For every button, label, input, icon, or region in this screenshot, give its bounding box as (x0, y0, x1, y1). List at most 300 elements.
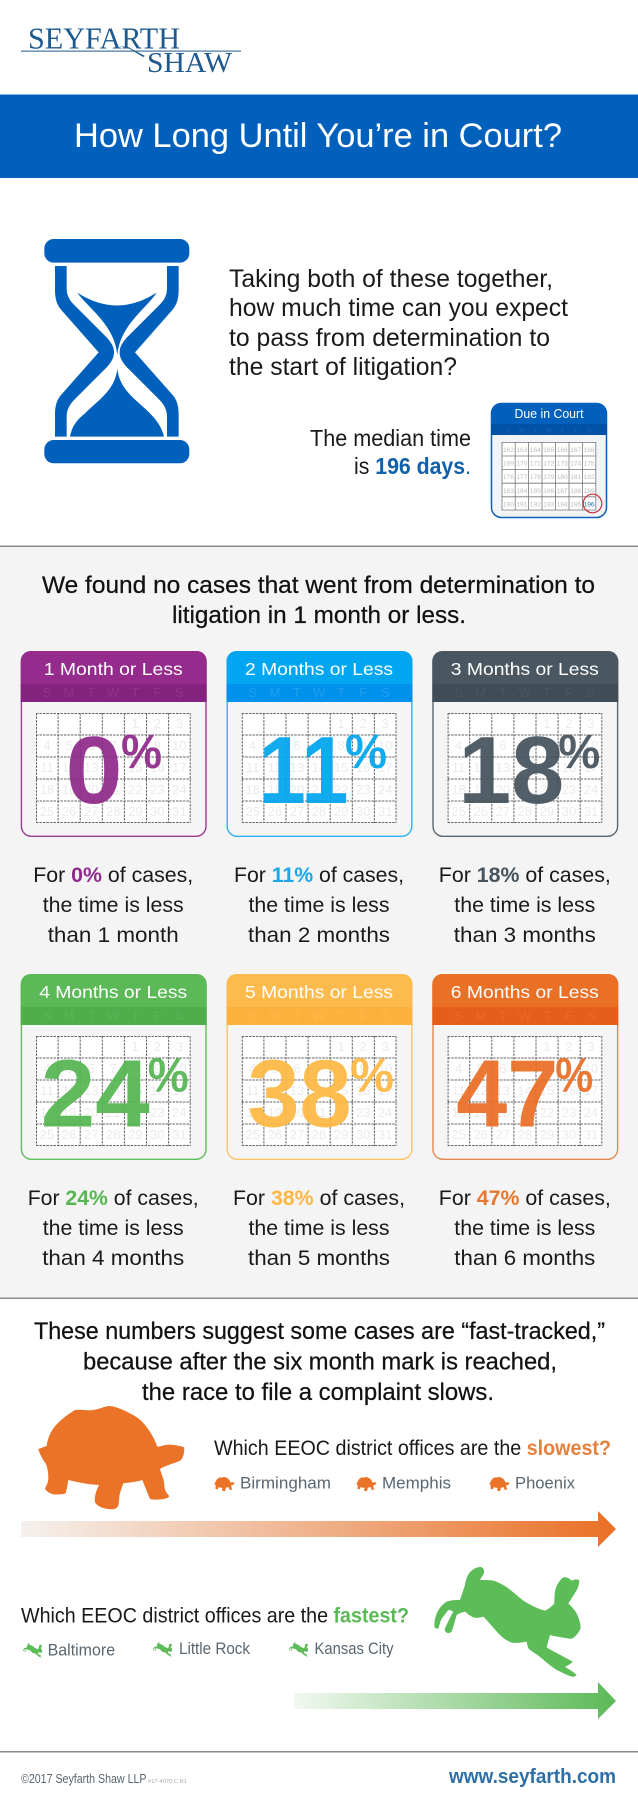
panel: 5 months or less: 11 (246, 1083, 260, 1098)
panel: 2 months or less: 1 (337, 716, 345, 731)
panel: 2 months or less: 25 (246, 804, 260, 819)
fastest office: Little Rock: Little Rock (179, 1639, 250, 1658)
panel: 3 months or less: 10 (584, 738, 598, 753)
footer rule (0, 1751, 638, 1752)
panel: 1 month or less: 6 (88, 738, 95, 753)
panel: 1 month or less: 30 (150, 804, 165, 819)
panel: 3 months or less: S (454, 685, 463, 700)
icon: due in court calendar: 167 (570, 447, 582, 454)
fastest office: Little Rock (153, 1639, 250, 1658)
panel: 2 months or less: % (345, 726, 387, 779)
panel: 6 months or less: For 47% of cases, (439, 1186, 611, 1210)
panel: 2 months or less: M (269, 685, 280, 700)
icon: due in court calendar: S (587, 428, 592, 434)
panel: 5 months or less: the time is less (248, 1216, 390, 1240)
icon: due in court calendar: 191 (516, 501, 528, 508)
panel: 3 months or less: 2 (565, 716, 573, 731)
panel: 4 months or less: 14 (106, 1083, 120, 1098)
icon: large turtle (38, 1406, 184, 1509)
panel: 6 months or less: M (475, 1008, 486, 1023)
panel: 1 month or less: 9 (154, 738, 161, 753)
panel: 3 months or less: 13 (496, 760, 510, 775)
panel: 2 months or less: 10 (378, 738, 392, 753)
panel: 3 months or less: 16 (562, 760, 576, 775)
fastest office: Baltimore: Baltimore (48, 1640, 115, 1660)
logo: Seyfarth Shaw (21, 20, 241, 79)
panel: 5 months or less: 20 (290, 1105, 304, 1120)
panel: 6 months or less: 27 (496, 1127, 510, 1142)
panel: 4 months or less: 6 (88, 1061, 95, 1076)
icon: due in court calendar: 195 (570, 501, 582, 508)
panel: 5 months or less: 28 (312, 1127, 326, 1142)
panel: 2 months or less: 5 (271, 738, 279, 753)
panel: 4 months or less: 9 (154, 1061, 161, 1076)
panel: 1 month or less: 27 (84, 804, 98, 819)
panel: 5 months or less: 8 (337, 1061, 345, 1076)
icon: due in court calendar: 183 (503, 488, 514, 495)
panel: 2 months or less: 21 (312, 782, 326, 797)
panel: 4 months or less: 2 (154, 1039, 161, 1054)
panel: 2 months or less: 26 (268, 804, 282, 819)
icon: due in court calendar: 194 (557, 501, 568, 508)
panel: 6 months or less: 11 (452, 1083, 465, 1098)
panel: 3 months or less: 22 (540, 782, 554, 797)
panel: 2 months or less: 27 (290, 804, 304, 819)
icon: due in court calendar: 163 (516, 447, 528, 454)
panel: 3 months or less: T (499, 685, 507, 700)
panel: 3 months or less: 9 (565, 738, 573, 753)
icon: due in court calendar: 172 (543, 461, 555, 468)
panel: 4 months or less: 15 (128, 1083, 143, 1098)
fastest office: Kansas City (289, 1639, 394, 1658)
panel: 2 months or less: 18 (246, 782, 260, 797)
panel: 6 months or less: W (519, 1008, 532, 1023)
panel: 6 months or less: 18 (451, 1105, 466, 1120)
panel: 2 months or less: 22 (334, 782, 348, 797)
panel: 1 month or less: 29 (128, 804, 143, 819)
panel: 4 months or less: 24 (41, 1040, 150, 1148)
panel: 2 months or less: than 2 months (248, 923, 390, 947)
panel: 2 months or less: T (337, 685, 345, 700)
panel: 3 months or less: 31 (584, 804, 598, 819)
panel: 5 months or less: 4 (249, 1061, 256, 1076)
panel: 3 months or less: 29 (540, 804, 554, 819)
panel: 4 months or less: 16 (150, 1083, 165, 1098)
panel: 2 months or less: 4 (249, 738, 256, 753)
panel: 5 months or less: 30 (356, 1127, 370, 1142)
panel: 5 months or less: 23 (356, 1105, 370, 1120)
panel: 1 month or less: 28 (106, 804, 120, 819)
panel: 5 months or less: For 38% of cases, (233, 1186, 405, 1210)
icon: due in court calendar: 170 (516, 461, 528, 468)
panel: 4 months or less: S (43, 1008, 52, 1023)
panel: 6 months or less: T (543, 1008, 551, 1023)
icon: due in court calendar: F (574, 428, 578, 434)
median time callout: The median time (310, 425, 471, 451)
panel: 1 month or less: For 0% of cases, (33, 863, 193, 887)
panel: 4 months or less: 25 (40, 1127, 54, 1142)
panel: 6 months or less: 8 (543, 1061, 551, 1076)
icon: due in court calendar: 166 (557, 447, 568, 454)
panel: 1 month or less: 16 (150, 760, 165, 775)
panel: 6 months or less: 3 (587, 1039, 595, 1054)
panel: 6 months or less: 13 (496, 1083, 510, 1098)
footer website: www.seyfarth.com (448, 1766, 616, 1788)
panel: 1 month or less: 2 (154, 716, 161, 731)
panel: 6 months or less: 21 (518, 1105, 532, 1120)
panel: 5 months or less: T (293, 1008, 301, 1023)
panel: 3 months or less: 15 (540, 760, 554, 775)
panel: 2 months or less: For 11% of cases, (234, 863, 404, 887)
panel: 2 months or less: W (313, 685, 326, 700)
panel: 5 months or less: 10 (378, 1061, 392, 1076)
panel: 3 months or less: 6 (499, 738, 506, 753)
panel: 5 months or less: 38 (248, 1040, 352, 1148)
panel: 4 months or less: 26 (62, 1127, 76, 1142)
panel: 1 month or less: 15 (128, 760, 143, 775)
slowest office: Memphis: Memphis (382, 1474, 451, 1492)
icon: due in court calendar: 189 (584, 488, 595, 495)
fastest question: Which EEOC district offices are the fastest? (21, 1604, 409, 1628)
panel: 1 month or less: than 1 month (48, 923, 179, 947)
panel: 4 months or less: T (87, 1008, 95, 1023)
panel: 1 month or less: T (87, 685, 95, 700)
panel: 5 months or less: 21 (312, 1105, 326, 1120)
panel: 3 months or less: 21 (518, 782, 532, 797)
panel: 6 months or less: 5 (477, 1061, 484, 1076)
panel: 5 months or less: 24 (378, 1105, 392, 1120)
panel: 5 months or less: 13 (290, 1083, 304, 1098)
panel: 4 months or less: 17 (172, 1083, 187, 1098)
panel: 3 months or less: 27 (496, 804, 510, 819)
intro question: Taking both of these together, (229, 265, 553, 293)
intro question: to pass from determination to (229, 324, 550, 352)
panel: 5 months or less: F (359, 1008, 367, 1023)
icon: due in court calendar: 179 (543, 474, 555, 481)
fast-tracked statement: the race to file a complaint slows. (142, 1379, 494, 1406)
panel: 1 month or less: 1 (132, 716, 139, 731)
panel: 6 months or less: 29 (540, 1127, 554, 1142)
panel: 1 month or less: 31 (172, 804, 187, 819)
icon: due in court calendar: 181 (570, 474, 582, 481)
icon: due in court calendar: 192 (530, 501, 541, 508)
icon: large rabbit (434, 1567, 581, 1677)
slowest office: Phoenix (489, 1474, 575, 1492)
panel: 4 months or less: M (64, 1008, 75, 1023)
icon: due in court calendar: T (533, 428, 537, 434)
footer copyright: #17-4070 C R1 (148, 1779, 187, 1785)
fast-tracked statement: These numbers suggest some cases are “fast-tracked,” (34, 1318, 605, 1345)
panel: 3 months or less: 4 (455, 738, 462, 753)
panel: 3 months or less: 3 (587, 716, 595, 731)
panel: 1 month or less: 7 (110, 738, 117, 753)
panel: 2 months or less: 11 (246, 760, 260, 775)
panel: 5 months or less: 31 (378, 1127, 392, 1142)
icon: due in court calendar: T (560, 428, 564, 434)
icon: due in court calendar: 177 (516, 474, 528, 481)
panel: 2 months or less: 8 (337, 738, 345, 753)
panel: 3 months or less: 24 (584, 782, 598, 797)
icon: due in court calendar: 173 (557, 461, 568, 468)
intro question (229, 265, 568, 381)
panel: 2 months or less: 14 (312, 760, 326, 775)
icon: due in court calendar: 185 (530, 488, 541, 495)
slowest question: Which EEOC district offices are the slowest? (214, 1436, 611, 1460)
panel: 5 months or less: 18 (246, 1105, 260, 1120)
panel: 5 months or less: 6 (293, 1061, 301, 1076)
panel: 4 months or less: 29 (128, 1127, 143, 1142)
panel: 2 months or less: the time is less (248, 893, 390, 917)
icon: due in court calendar: 187 (557, 488, 568, 495)
panel: 3 months or less: W (519, 685, 532, 700)
panel: 5 months or less (226, 974, 412, 1270)
panel: 3 months or less: 18 (458, 717, 564, 824)
icon: due in court calendar: 193 (543, 501, 555, 508)
panel: 5 months or less: 9 (360, 1061, 367, 1076)
panel: 2 months or less: 7 (315, 738, 323, 753)
icon: due in court calendar: 176 (503, 474, 514, 481)
panel: 1 month or less: S (43, 685, 52, 700)
panel: 6 months or less: 15 (540, 1083, 554, 1098)
panel: 5 months or less: 1 (337, 1039, 345, 1054)
panel: 1 month or less: 5 (65, 738, 73, 753)
panel: 1 month or less: M (64, 685, 75, 700)
panel: 1 month or less: 11 (40, 760, 54, 775)
panel: 1 month or less: the time is less (43, 893, 184, 917)
panel: 1 month or less: S (175, 685, 184, 700)
panel: 1 month or less: 21 (106, 782, 120, 797)
panel: 2 months or less: 30 (356, 804, 370, 819)
panel: 6 months or less: 19 (473, 1105, 488, 1120)
panel: 1 month or less: F (153, 685, 161, 700)
panel: 4 months or less: W (107, 1008, 120, 1023)
icon: due in court calendar: 180 (557, 474, 568, 481)
slowest office: Birmingham: Birmingham (240, 1474, 331, 1492)
panel: 2 months or less: 12 (268, 760, 282, 775)
panel: 2 months or less: 31 (378, 804, 392, 819)
panel: 1 month or less: 18 (40, 782, 54, 797)
panel: 6 months or less: 7 (521, 1061, 528, 1076)
fastest office: Kansas City: Kansas City (314, 1639, 394, 1658)
panel: 6 months or less: the time is less (454, 1216, 595, 1240)
panel: 3 months or less: the time is less (454, 893, 595, 917)
icon: due in court calendar: 168 (584, 447, 595, 454)
panel: 4 months or less: 5 (65, 1061, 73, 1076)
panel: 5 months or less: 15 (334, 1083, 348, 1098)
icon: due in court calendar: W (546, 428, 553, 434)
panel: 5 months or less: 7 (315, 1061, 323, 1076)
logo: Seyfarth Shaw: SEYFARTH (28, 20, 180, 56)
panel: 3 months or less: 14 (518, 760, 532, 775)
panel: 6 months or less: than 6 months (454, 1246, 595, 1270)
panel: 1 month or less: % (121, 726, 162, 779)
panel: 3 months or less: 8 (543, 738, 551, 753)
panel: 2 months or less: 3 (382, 716, 389, 731)
panel: 5 months or less: S (248, 1008, 257, 1023)
icon: due in court calendar: Due in Court (514, 406, 584, 421)
panel: 4 months or less: 30 (150, 1127, 165, 1142)
panel: 5 months or less: 25 (246, 1127, 260, 1142)
panel: 5 months or less: 27 (290, 1127, 304, 1142)
panel: 3 months or less: 11 (452, 760, 465, 775)
arrow: slow orange (21, 1511, 616, 1547)
panel: 2 months or less: T (293, 685, 301, 700)
panel: 4 months or less: 10 (172, 1061, 187, 1076)
panel: 1 month or less (21, 651, 207, 947)
panel: gray findings section (0, 546, 638, 1299)
panel: 3 months or less: 1 (543, 716, 551, 731)
panel: 3 months or less: 7 (521, 738, 528, 753)
icon: due in court calendar: 164 (530, 447, 541, 454)
panel: 6 months or less: 25 (451, 1127, 466, 1142)
findings heading: We found no cases that went from determination to (42, 572, 595, 599)
panel: 5 months or less: 5 Months or Less (245, 982, 393, 1002)
panel: 2 months or less: 24 (378, 782, 392, 797)
panel: 6 months or less: 31 (584, 1127, 598, 1142)
panel: 4 months or less: 20 (84, 1105, 98, 1120)
panel: 6 months or less: S (454, 1008, 463, 1023)
panel: 6 months or less: 23 (562, 1105, 576, 1120)
panel: 2 months or less: S (381, 685, 390, 700)
panel: 2 months or less: 13 (290, 760, 304, 775)
panel: 4 months or less: 24 (172, 1105, 187, 1120)
panel: 6 months or less: T (499, 1008, 507, 1023)
fast-tracked statement: because after the six month mark is reached, (83, 1348, 557, 1376)
panel: 4 months or less: the time is less (43, 1216, 184, 1240)
panel: 4 months or less: S (175, 1008, 184, 1023)
panel: 6 months or less: 14 (518, 1083, 532, 1098)
panel: 6 months or less: % (555, 1050, 593, 1102)
panel: 2 months or less: 29 (334, 804, 348, 819)
panel: 2 months or less: 2 (360, 716, 367, 731)
panel: 2 months or less: 11 (258, 717, 348, 824)
icon: due in court calendar: 186 (543, 488, 555, 495)
panel: 6 months or less: 1 (543, 1039, 551, 1054)
panel: 5 months or less: W (313, 1008, 326, 1023)
panel: 4 months or less: 18 (40, 1105, 54, 1120)
panel: 4 months or less: 31 (172, 1127, 187, 1142)
footer copyright: ©2017 Seyfarth Shaw LLP (21, 1771, 146, 1786)
intro question: the start of litigation? (229, 353, 457, 381)
panel: 1 month or less: 19 (62, 782, 76, 797)
panel: 5 months or less: 5 (271, 1061, 279, 1076)
panel: 5 months or less: 29 (334, 1127, 348, 1142)
panel: 4 months or less: For 24% of cases, (28, 1186, 199, 1210)
panel: 4 months or less: 4 Months or Less (39, 982, 187, 1002)
panel: 1 month or less: 22 (128, 782, 143, 797)
panel: 6 months or less: 20 (496, 1105, 510, 1120)
panel: 4 months or less: 7 (110, 1061, 117, 1076)
panel: 4 months or less: 1 (132, 1039, 139, 1054)
title banner (0, 94, 638, 178)
panel: 3 months or less: 5 (477, 738, 484, 753)
panel: 6 months or less: 26 (473, 1127, 488, 1142)
panel: 2 months or less: 15 (334, 760, 348, 775)
panel: 6 months or less: 30 (562, 1127, 576, 1142)
panel: 2 months or less: F (359, 685, 367, 700)
panel: 3 months or less: 20 (496, 782, 510, 797)
panel: 6 months or less: 6 Months or Less (451, 982, 599, 1002)
panel: 4 months or less: 21 (106, 1105, 120, 1120)
panel: 6 months or less: 17 (584, 1083, 598, 1098)
panel: 4 months or less: than 4 months (42, 1246, 184, 1270)
icon: due in court calendar: 175 (584, 461, 595, 468)
panel: 4 months or less: % (148, 1050, 189, 1102)
panel: 1 month or less: 14 (106, 760, 120, 775)
panel: 5 months or less: 17 (378, 1083, 392, 1098)
slowest office: Phoenix: Phoenix (515, 1474, 575, 1492)
icon: due in court calendar (491, 403, 607, 518)
median time callout: is 196 days. (354, 453, 471, 479)
panel: 3 months or less: 25 (451, 804, 466, 819)
panel: 1 month or less: 12 (62, 760, 76, 775)
panel: 3 months or less: 23 (562, 782, 576, 797)
icon: due in court calendar: S (506, 428, 511, 434)
panel: 2 months or less: 19 (268, 782, 282, 797)
panel: 2 months or less: 9 (360, 738, 367, 753)
panel: 3 months or less (432, 651, 618, 947)
panel: 6 months or less (432, 974, 618, 1270)
panel: 4 months or less: 28 (106, 1127, 120, 1142)
panel: 4 months or less: 11 (40, 1083, 54, 1098)
panel: 4 months or less: 23 (150, 1105, 165, 1120)
panel: 1 month or less: 24 (172, 782, 187, 797)
panel: 2 months or less: 2 Months or Less (245, 659, 393, 679)
panel: 5 months or less: 12 (268, 1083, 282, 1098)
panel: 3 months or less: 30 (562, 804, 576, 819)
panel: 5 months or less: % (350, 1050, 394, 1102)
panel: 4 months or less: 27 (84, 1127, 98, 1142)
panel: 6 months or less: 9 (565, 1061, 573, 1076)
icon: due in court calendar: 165 (543, 447, 555, 454)
panel: 3 months or less: 28 (518, 804, 532, 819)
panel: 4 months or less: T (131, 1008, 139, 1023)
panel: 2 months or less: 23 (356, 782, 370, 797)
icon: due in court calendar: 182 (584, 474, 595, 481)
panel: 5 months or less: M (269, 1008, 280, 1023)
icon: due in court calendar: 178 (530, 474, 541, 481)
panel: 5 months or less: 14 (312, 1083, 326, 1098)
intro question: how much time can you expect (229, 294, 568, 322)
fast-tracked statement (34, 1318, 605, 1406)
panel: 1 month or less: 10 (172, 738, 187, 753)
panel: 5 months or less: 3 (382, 1039, 389, 1054)
panel: 3 months or less: 26 (473, 804, 488, 819)
icon: hourglass (44, 239, 189, 463)
panel: 1 month or less: 13 (84, 760, 98, 775)
panel: 3 months or less: 17 (584, 760, 598, 775)
icon: due in court calendar: 169 (503, 461, 514, 468)
panel: 6 months or less: 6 (499, 1061, 506, 1076)
panel: 5 months or less: S (381, 1008, 390, 1023)
panel: 2 months or less: 28 (312, 804, 326, 819)
icon: due in court calendar: 174 (570, 461, 582, 468)
panel: 4 months or less: F (153, 1008, 161, 1023)
panel: 5 months or less: 19 (268, 1105, 282, 1120)
median time callout (310, 425, 471, 479)
panel: 4 months or less: 13 (84, 1083, 98, 1098)
panel: 1 month or less: 1 Month or Less (44, 659, 183, 679)
icon: due in court calendar: 190 (503, 501, 514, 508)
panel: 4 months or less: 19 (62, 1105, 76, 1120)
panel: 3 months or less: 12 (473, 760, 488, 775)
panel: 5 months or less: 26 (268, 1127, 282, 1142)
panel: 3 months or less: 18 (451, 782, 466, 797)
icon: due in court calendar: 171 (530, 461, 541, 468)
panel: 1 month or less: 3 (176, 716, 183, 731)
panel: 3 months or less: F (565, 685, 573, 700)
panel: 4 months or less: 8 (132, 1061, 139, 1076)
